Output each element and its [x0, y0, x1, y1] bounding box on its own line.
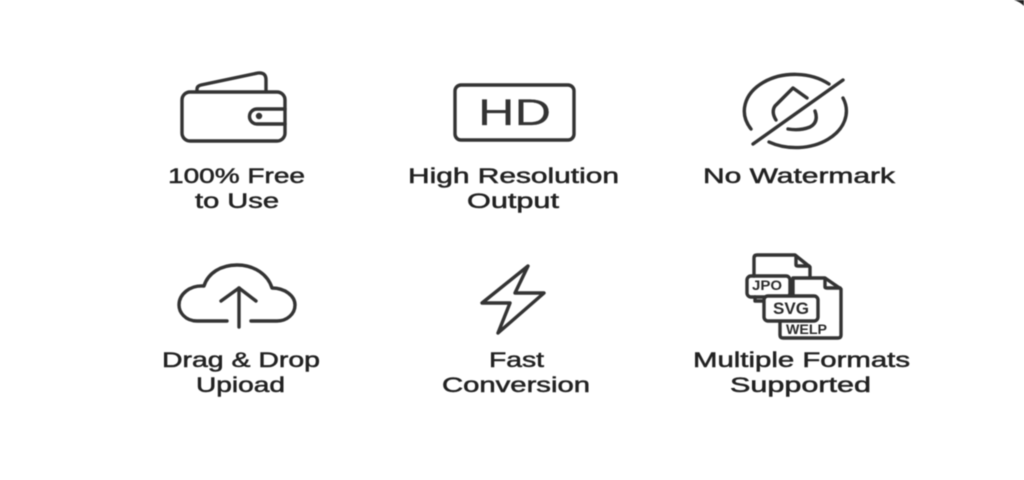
- label: Drag & Drop Upioad: [162, 349, 320, 397]
- label: High Resolution Output: Output: [467, 190, 559, 213]
- label: High Resolution Output: [408, 165, 619, 213]
- panel: drag and drop upload: [162, 265, 320, 397]
- label: Multiple Formats Supported: [693, 349, 910, 397]
- icon: stacked format files: SVG: [773, 300, 809, 318]
- icon: stacked format files: [747, 255, 841, 338]
- label: Fast Conversion: Conversion: [442, 374, 590, 397]
- corner: dark page edge: [1014, 0, 1024, 6]
- label: High Resolution Output: High Resolution: [408, 165, 619, 188]
- icon: crossed-out water drop: [744, 74, 846, 148]
- icon: stacked format files: WELP: [786, 322, 827, 337]
- label: Drag & Drop Upioad: Upioad: [196, 374, 285, 397]
- panel: 100% free to use: [168, 73, 305, 213]
- panel: multiple formats supported: [693, 255, 910, 397]
- label: Multiple Formats Supported: Multiple Formats: [693, 349, 910, 372]
- label: 100% Free to Use: [168, 165, 305, 213]
- icon: cloud upload: [179, 265, 295, 327]
- label: 100% Free to Use: to Use: [195, 190, 279, 213]
- icon: stacked format files: JPO: [752, 278, 782, 293]
- label: Multiple Formats Supported: Supported: [730, 374, 871, 397]
- panel: fast conversion: [442, 266, 590, 397]
- label: 100% Free to Use: 100% Free: [168, 165, 305, 188]
- label: No Watermark: No Watermark: [703, 165, 896, 188]
- label: Fast Conversion: [442, 349, 590, 397]
- icon: HD badge: HD: [478, 92, 551, 133]
- panel: high resolution output: [408, 85, 619, 213]
- icon: HD badge: [455, 85, 574, 140]
- icon: wallet: [182, 73, 285, 141]
- icon: lightning bolt: [482, 266, 544, 333]
- label: Fast Conversion: Fast: [489, 349, 544, 372]
- label: Drag & Drop Upioad: Drag & Drop: [162, 349, 320, 372]
- panel: no watermark: [703, 74, 896, 188]
